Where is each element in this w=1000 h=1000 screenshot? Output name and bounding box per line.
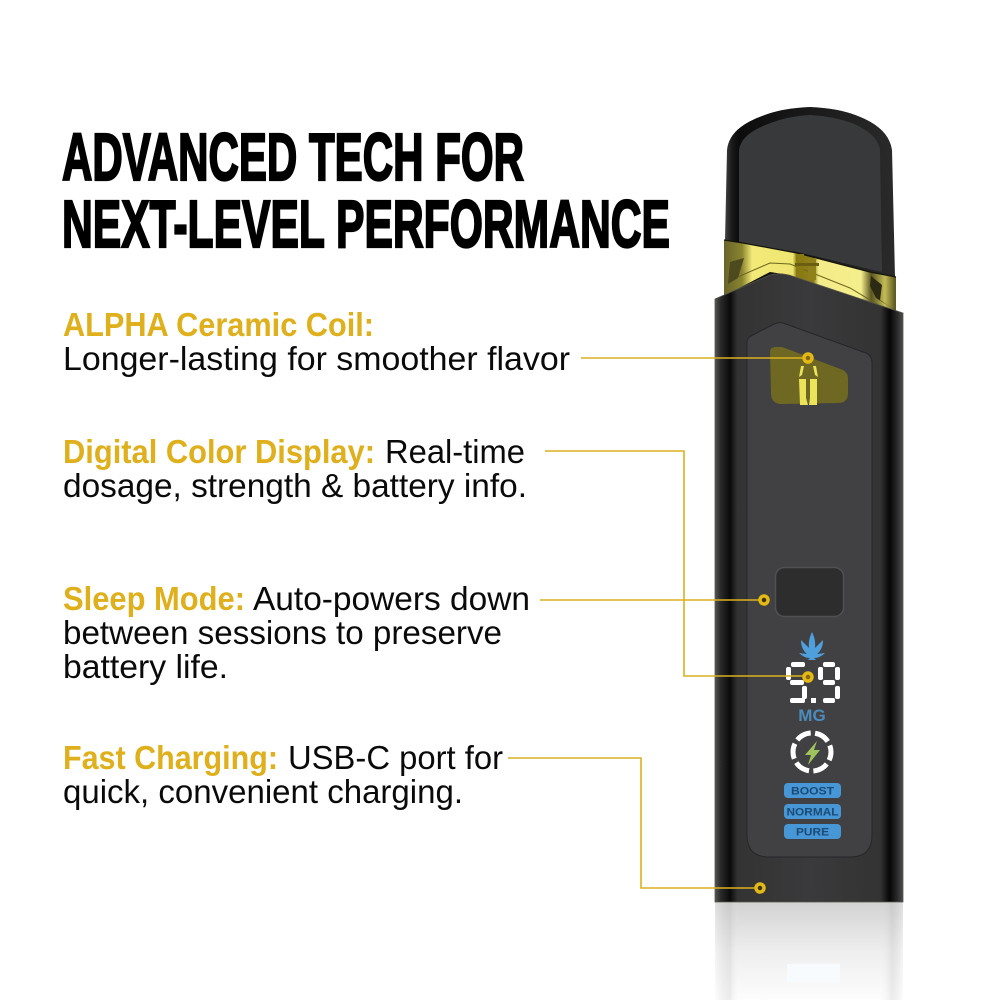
text block: Fast Charging: USB-C port for xyxy=(288,739,503,776)
title: ADVANCED TECH FOR xyxy=(62,120,524,195)
text block: Fast Charging: Fast Charging: xyxy=(63,739,278,776)
text block: Sleep Mode: Auto-powers down xyxy=(253,580,530,617)
text block: Digital Color Display: Digital Color Display: xyxy=(63,433,375,470)
title: NEXT-LEVEL PERFORMANCE xyxy=(62,187,670,262)
text block: ALPHA Ceramic Coil: Longer-lasting for smoother flavor xyxy=(63,340,570,377)
device: vape pen xyxy=(715,107,903,1000)
device reflection xyxy=(715,902,903,1000)
callout line: sleep xyxy=(540,596,768,604)
text block: Sleep Mode xyxy=(63,580,530,685)
text block: Digital Color Display xyxy=(63,433,527,504)
device yellow tank xyxy=(724,240,896,318)
coil window xyxy=(770,347,848,405)
mode badge: NORMAL xyxy=(784,804,841,819)
callout line: charging xyxy=(508,758,764,892)
icon: cannabis leaf xyxy=(799,632,825,660)
digital readout xyxy=(786,662,840,703)
text block: Sleep Mode: between sessions to preserve xyxy=(63,614,502,651)
text block: ALPHA Ceramic Coil xyxy=(63,306,570,377)
text block: Fast Charging: quick, convenient charging. xyxy=(63,773,463,810)
mode badge: NORMAL: NORMAL xyxy=(786,806,839,818)
device mouthpiece xyxy=(725,107,896,320)
device body xyxy=(715,274,903,902)
text block: Sleep Mode: Sleep Mode: xyxy=(63,580,245,617)
mode badge: PURE xyxy=(784,824,841,839)
text block: Sleep Mode: battery life. xyxy=(63,648,228,685)
MG label: MG xyxy=(798,706,826,725)
text block: Fast Charging xyxy=(63,739,503,810)
callout line: display xyxy=(545,451,812,681)
mode badge: BOOST: BOOST xyxy=(791,786,834,798)
mode badge: BOOST xyxy=(784,783,841,798)
sleep mode button xyxy=(776,568,844,616)
text block: ALPHA Ceramic Coil: ALPHA Ceramic Coil: xyxy=(63,306,374,343)
callout line: coil xyxy=(581,354,812,362)
text block: Digital Color Display: Real-time xyxy=(385,433,525,470)
mode badge: PURE: PURE xyxy=(796,826,829,838)
icon: charging ring xyxy=(793,733,831,771)
title xyxy=(62,120,670,262)
text block: Digital Color Display: dosage, strength & battery info. xyxy=(63,467,527,504)
device display panel xyxy=(747,323,872,857)
